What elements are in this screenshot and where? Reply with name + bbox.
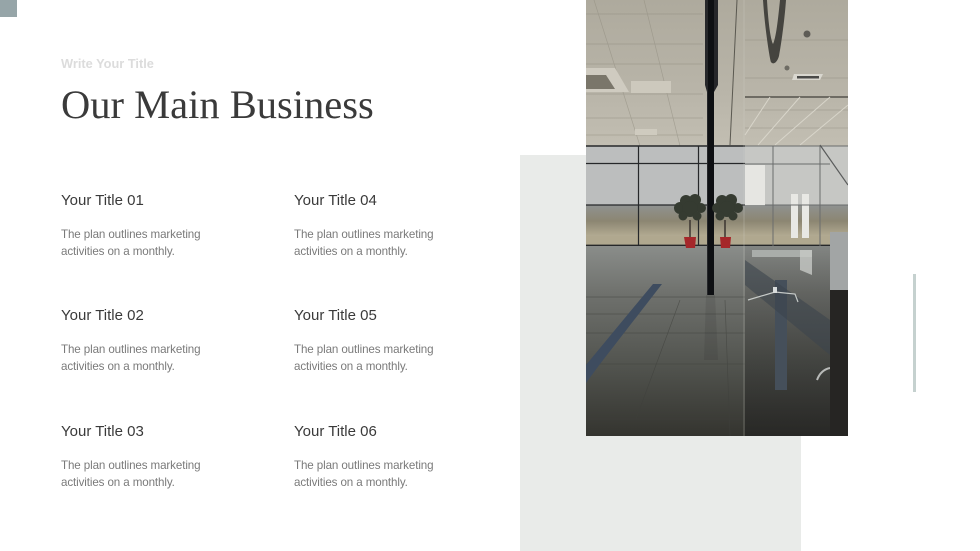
item: title 03: Your Title 03 [61,423,144,440]
side accent bar [913,274,916,392]
item: title 02: The plan outlines marketing [61,343,200,356]
item: title 03: The plan outlines marketing [61,459,200,472]
item: title 02: Your Title 02 [61,307,144,324]
potted plant right [712,194,743,248]
item: title 01: The plan outlines marketing [61,228,200,241]
hanging dark oval reflection [763,0,786,63]
window wall [586,146,848,206]
dark cabinet at right [830,290,848,436]
item: title 05: Your Title 05 [294,307,377,324]
item: title 01 [61,192,200,258]
item: title 06: activities on a monthly. [294,476,408,489]
item: title 05: activities on a monthly. [294,360,408,373]
item: title 06: Your Title 06 [294,423,377,440]
item: title 01: activities on a monthly. [61,245,175,258]
item: title 03: activities on a monthly. [61,476,175,489]
floor [586,246,848,436]
potted plant left [674,194,706,248]
item: title 06 [294,423,433,489]
title: Our Main Business [61,82,374,127]
corner accent square [0,0,17,17]
ceiling panels and vents [631,81,671,93]
blue floor stripe [586,284,662,383]
item: title 05 [294,307,433,373]
item: title 06: The plan outlines marketing [294,459,433,472]
eyebrow label: Write Your Title [61,56,154,71]
light grey background panel [520,155,801,551]
item: title 05: The plan outlines marketing [294,343,433,356]
item: title 01: Your Title 01 [61,192,144,209]
item: title 02 [61,307,200,373]
floor reflections [775,280,787,390]
glass panel edge [743,0,745,436]
column [705,0,718,295]
item: title 04: Your Title 04 [294,192,377,209]
chair reflection [748,292,798,302]
item: title 04 [294,192,433,258]
photo: office interior with glass wall [586,0,848,436]
item: title 04: activities on a monthly. [294,245,408,258]
ceiling [586,0,848,146]
item: title 04: The plan outlines marketing [294,228,433,241]
item: title 03 [61,423,200,489]
item: title 02: activities on a monthly. [61,360,175,373]
